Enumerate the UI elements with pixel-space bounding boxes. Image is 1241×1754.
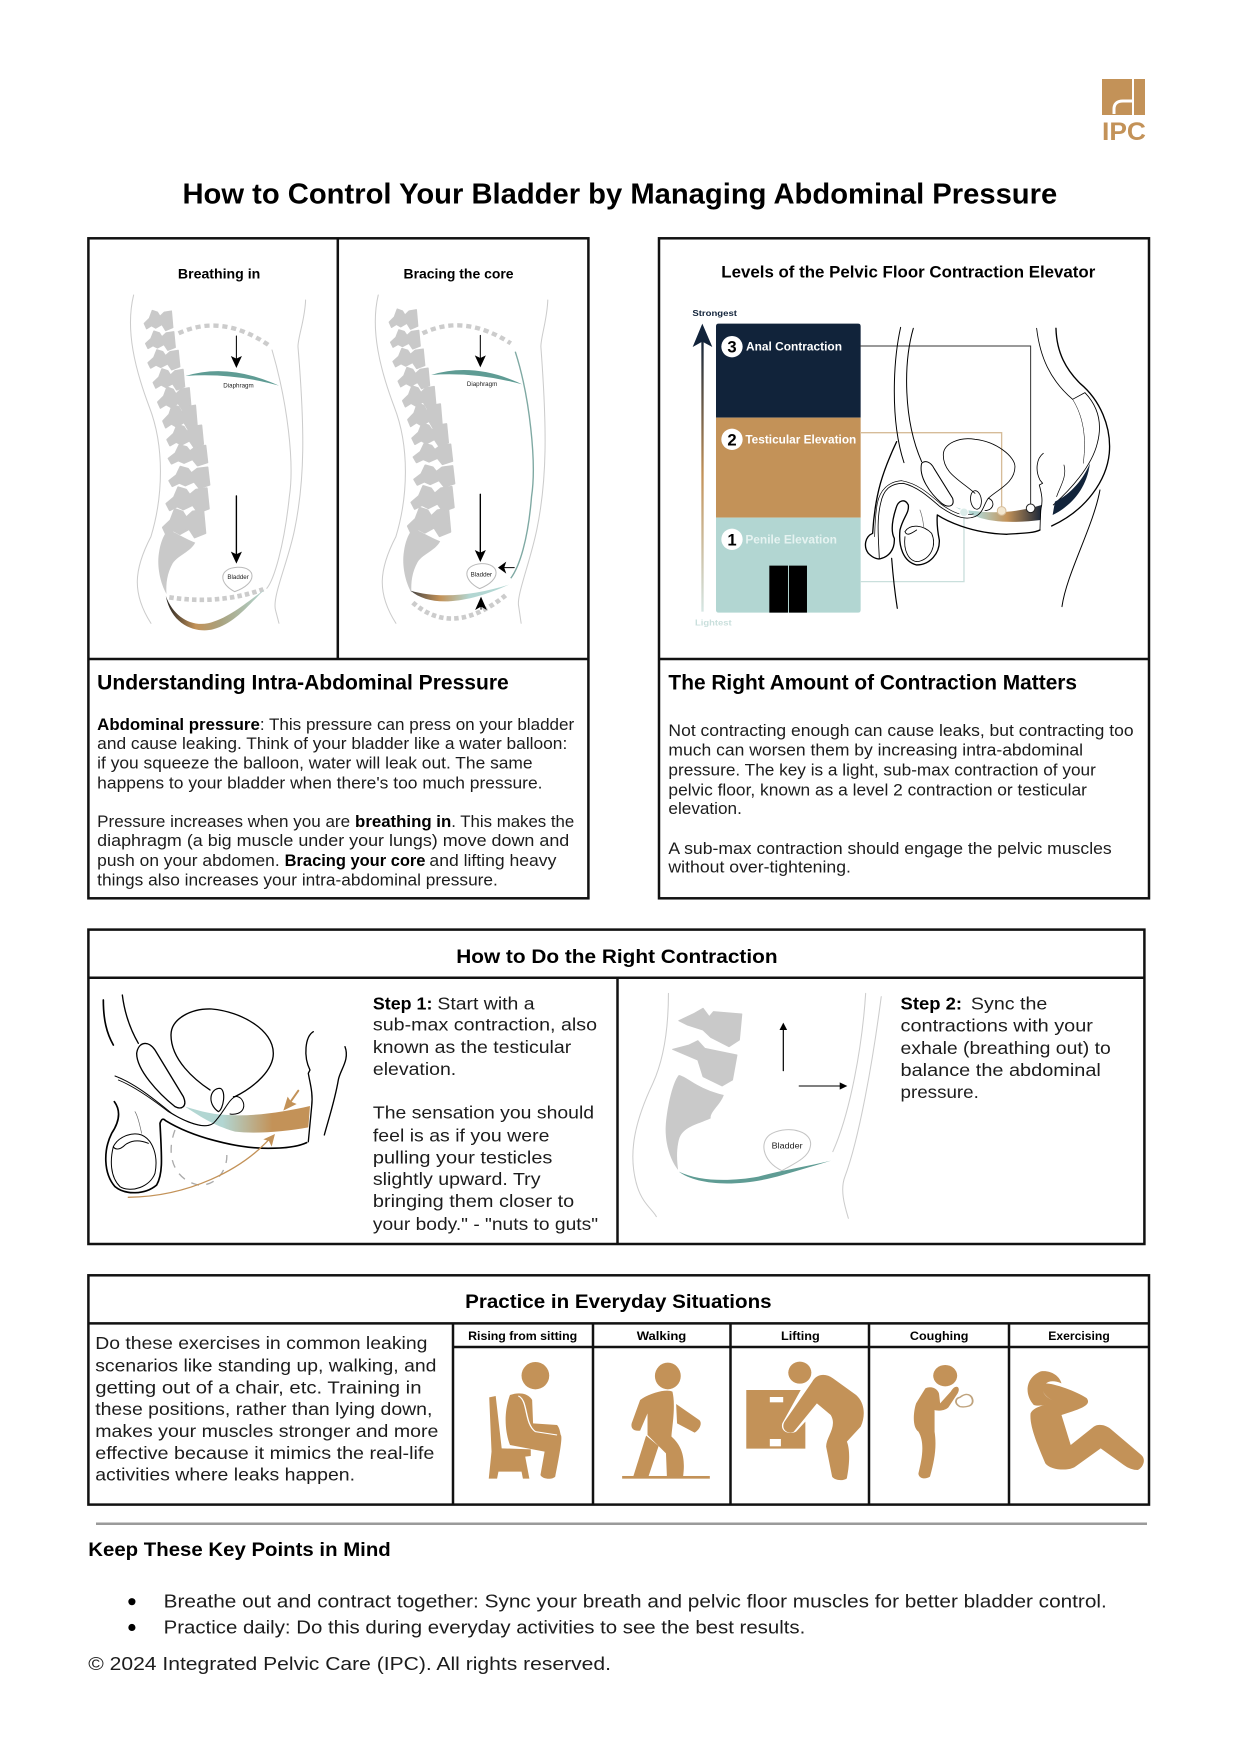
panel: understanding intra-abdominal pressure bbox=[88, 238, 588, 898]
heading: understanding: Understanding Intra-Abdominal Pressure bbox=[97, 671, 509, 694]
diagram: pelvic floor contraction elevator: Penile Elevation bbox=[745, 532, 837, 546]
copyright: © 2024 Integrated Pelvic Care (IPC). All rights reserved. bbox=[88, 1653, 611, 1674]
panel: practice in everyday situations bbox=[88, 1275, 1149, 1505]
diagram: pelvic floor contraction elevator: Testicular Elevation bbox=[745, 432, 856, 446]
text: step 1: slightly upward. Try bbox=[373, 1169, 541, 1189]
text: breathing and bracing paragraph: . This makes the bbox=[451, 813, 574, 831]
labels: situations: Exercising bbox=[1048, 1329, 1110, 1343]
text: abdominal pressure paragraph: happens to your bladder when there's too much pressure. bbox=[97, 774, 542, 792]
text: practice description: makes your muscles stronger and more bbox=[95, 1421, 438, 1441]
text: sub-max paragraph bbox=[667, 840, 1112, 877]
diagram: pelvic floor contraction elevator: 1 bbox=[727, 530, 737, 549]
heading: right amount: The Right Amount of Contraction Matters bbox=[668, 671, 1077, 694]
text: step 1: feel is as if you were bbox=[373, 1126, 550, 1146]
text: step 2: balance the abdominal bbox=[901, 1060, 1101, 1080]
list: key points: Practice daily: Do this during everyday activities to see the best results. bbox=[164, 1616, 805, 1637]
text: sub-max paragraph: without over-tightening. bbox=[667, 859, 851, 877]
text: breathing and bracing paragraph: Bracing your core bbox=[285, 852, 425, 870]
text: step 2: contractions with your bbox=[901, 1015, 1093, 1035]
text: step 1: pulling your testicles bbox=[373, 1147, 552, 1167]
text: abdominal pressure paragraph: Abdominal pressure bbox=[97, 716, 260, 734]
labels: situations: Walking bbox=[637, 1329, 686, 1343]
logo: IPC bbox=[1102, 118, 1146, 146]
text: step 1: The sensation you should bbox=[373, 1103, 594, 1123]
text: step 2: Step 2: bbox=[901, 994, 962, 1014]
text: step 1: elevation. bbox=[373, 1059, 456, 1079]
anatomy: side-view pelvis bbox=[860, 327, 1110, 608]
text: step 1: bringing them closer to bbox=[373, 1191, 574, 1211]
diagram: pelvic floor contraction elevator: 2 bbox=[727, 430, 737, 449]
illustration: step 2 exhale bbox=[633, 993, 881, 1218]
text: step 1: Step 1: bbox=[373, 994, 432, 1014]
title: How to Control Your Bladder by Managing Abdominal Pressure bbox=[182, 178, 1057, 210]
text: step 1: sub-max contraction, also bbox=[373, 1014, 597, 1034]
text: step 1: known as the testicular bbox=[373, 1037, 571, 1057]
text: practice description: effective because it mimics the real-life bbox=[95, 1443, 434, 1463]
icon: coughing bbox=[914, 1365, 973, 1478]
diagram: bracing the core: Diaphragm bbox=[467, 381, 497, 388]
icon: rising from sitting bbox=[489, 1362, 561, 1479]
diagram: bracing the core bbox=[375, 267, 548, 623]
text: breathing and bracing paragraph: things also increases your intra-abdominal pressure. bbox=[97, 872, 498, 890]
list: key points bbox=[128, 1591, 1107, 1637]
text: step 2: Sync the bbox=[971, 994, 1047, 1014]
diagram: breathing in: Bladder bbox=[227, 574, 249, 581]
text: step 1: Start with a bbox=[437, 994, 535, 1014]
icon: lifting bbox=[746, 1362, 864, 1480]
labels: situations bbox=[468, 1329, 1110, 1343]
text: sub-max paragraph: A sub-max contraction should engage the pelvic muscles bbox=[668, 840, 1112, 858]
text: contraction paragraph: pressure. The key is a light, sub-max contraction of your bbox=[668, 762, 1096, 780]
text: practice description: these positions, rather than lying down, bbox=[95, 1399, 432, 1419]
text: contraction paragraph: Not contracting enough can cause leaks, but contracting too bbox=[668, 722, 1134, 740]
text: breathing and bracing paragraph bbox=[97, 813, 574, 890]
text: breathing and bracing paragraph: and lifting heavy bbox=[429, 852, 557, 870]
text: step 2 bbox=[901, 994, 1111, 1102]
diagram: bracing the core: Bracing the core bbox=[404, 267, 514, 283]
labels: situations: Coughing bbox=[910, 1329, 968, 1343]
text: abdominal pressure paragraph: : This pressure can press on your bladder bbox=[260, 716, 575, 734]
text: practice description: scenarios like standing up, walking, and bbox=[95, 1356, 436, 1376]
diagram: pelvic floor contraction elevator: Levels of the Pelvic Floor Contraction Elevator bbox=[721, 262, 1096, 281]
divider line bbox=[96, 1522, 1147, 1525]
text: practice description: Do these exercises in common leaking bbox=[95, 1333, 427, 1353]
illustration: step 1 pelvic anatomy bbox=[103, 995, 346, 1197]
text: breathing and bracing paragraph: Pressure increases when you are bbox=[97, 813, 350, 831]
labels: situations: Rising from sitting bbox=[468, 1329, 577, 1343]
diagram: pelvic floor contraction elevator: Lightest bbox=[695, 618, 732, 628]
text: step 1 bbox=[373, 994, 598, 1234]
diagram: pelvic floor contraction elevator: 3 bbox=[727, 338, 737, 357]
text: step 1: your body." - "nuts to guts" bbox=[373, 1214, 598, 1234]
icons: situations bbox=[489, 1362, 1144, 1480]
diagram: pelvic floor contraction elevator: Anal Contraction bbox=[746, 340, 842, 354]
icon: walking bbox=[622, 1363, 710, 1479]
diagram: pelvic floor contraction elevator bbox=[692, 262, 1110, 628]
diagram: breathing in: Breathing in bbox=[178, 267, 260, 283]
heading: practice: Practice in Everyday Situations bbox=[465, 1291, 772, 1313]
heading: key points: Keep These Key Points in Mind bbox=[88, 1539, 391, 1561]
text: abdominal pressure paragraph: if you squeeze the balloon, water will leak out. The same bbox=[97, 755, 533, 773]
text: contraction paragraph bbox=[668, 722, 1134, 818]
illustration: step 2 exhale: Bladder bbox=[772, 1141, 803, 1151]
panel: right amount of contraction bbox=[659, 238, 1149, 898]
diagram: pelvic floor contraction elevator: Strongest bbox=[692, 308, 737, 318]
labels: situations: Lifting bbox=[781, 1329, 820, 1343]
text: abdominal pressure paragraph: and cause leaking. Think of your bladder like a water balloon: bbox=[97, 735, 567, 753]
text: contraction paragraph: much can worsen them by increasing intra-abdominal bbox=[668, 742, 1083, 760]
diagram: bracing the core: Bladder bbox=[471, 571, 492, 578]
text: abdominal pressure paragraph bbox=[97, 716, 575, 792]
text: contraction paragraph: pelvic floor, known as a level 2 contraction or testicular bbox=[668, 781, 1088, 799]
text: contraction paragraph: elevation. bbox=[668, 800, 742, 818]
text: step 2: exhale (breathing out) to bbox=[901, 1038, 1111, 1058]
logo bbox=[1102, 79, 1146, 146]
icon: exercising bbox=[1028, 1371, 1144, 1470]
text: practice description bbox=[95, 1333, 438, 1485]
diagram: breathing in bbox=[130, 267, 306, 630]
text: practice description: activities where leaks happen. bbox=[95, 1465, 355, 1485]
text: step 2: pressure. bbox=[901, 1082, 979, 1102]
text: practice description: getting out of a chair, etc. Training in bbox=[95, 1377, 421, 1397]
panel: how to do the right contraction bbox=[88, 930, 1144, 1244]
text: breathing and bracing paragraph: push on your abdomen. bbox=[97, 852, 280, 870]
text: breathing and bracing paragraph: breathing in bbox=[355, 813, 451, 831]
heading: how to: How to Do the Right Contraction bbox=[456, 946, 778, 968]
text: breathing and bracing paragraph: diaphragm (a big muscle under your lungs) move down and bbox=[97, 832, 569, 850]
diagram: breathing in: Diaphragm bbox=[223, 382, 254, 389]
list: key points: Breathe out and contract together: Sync your breath and pelvic floor muscles for better bladder control. bbox=[164, 1591, 1107, 1612]
